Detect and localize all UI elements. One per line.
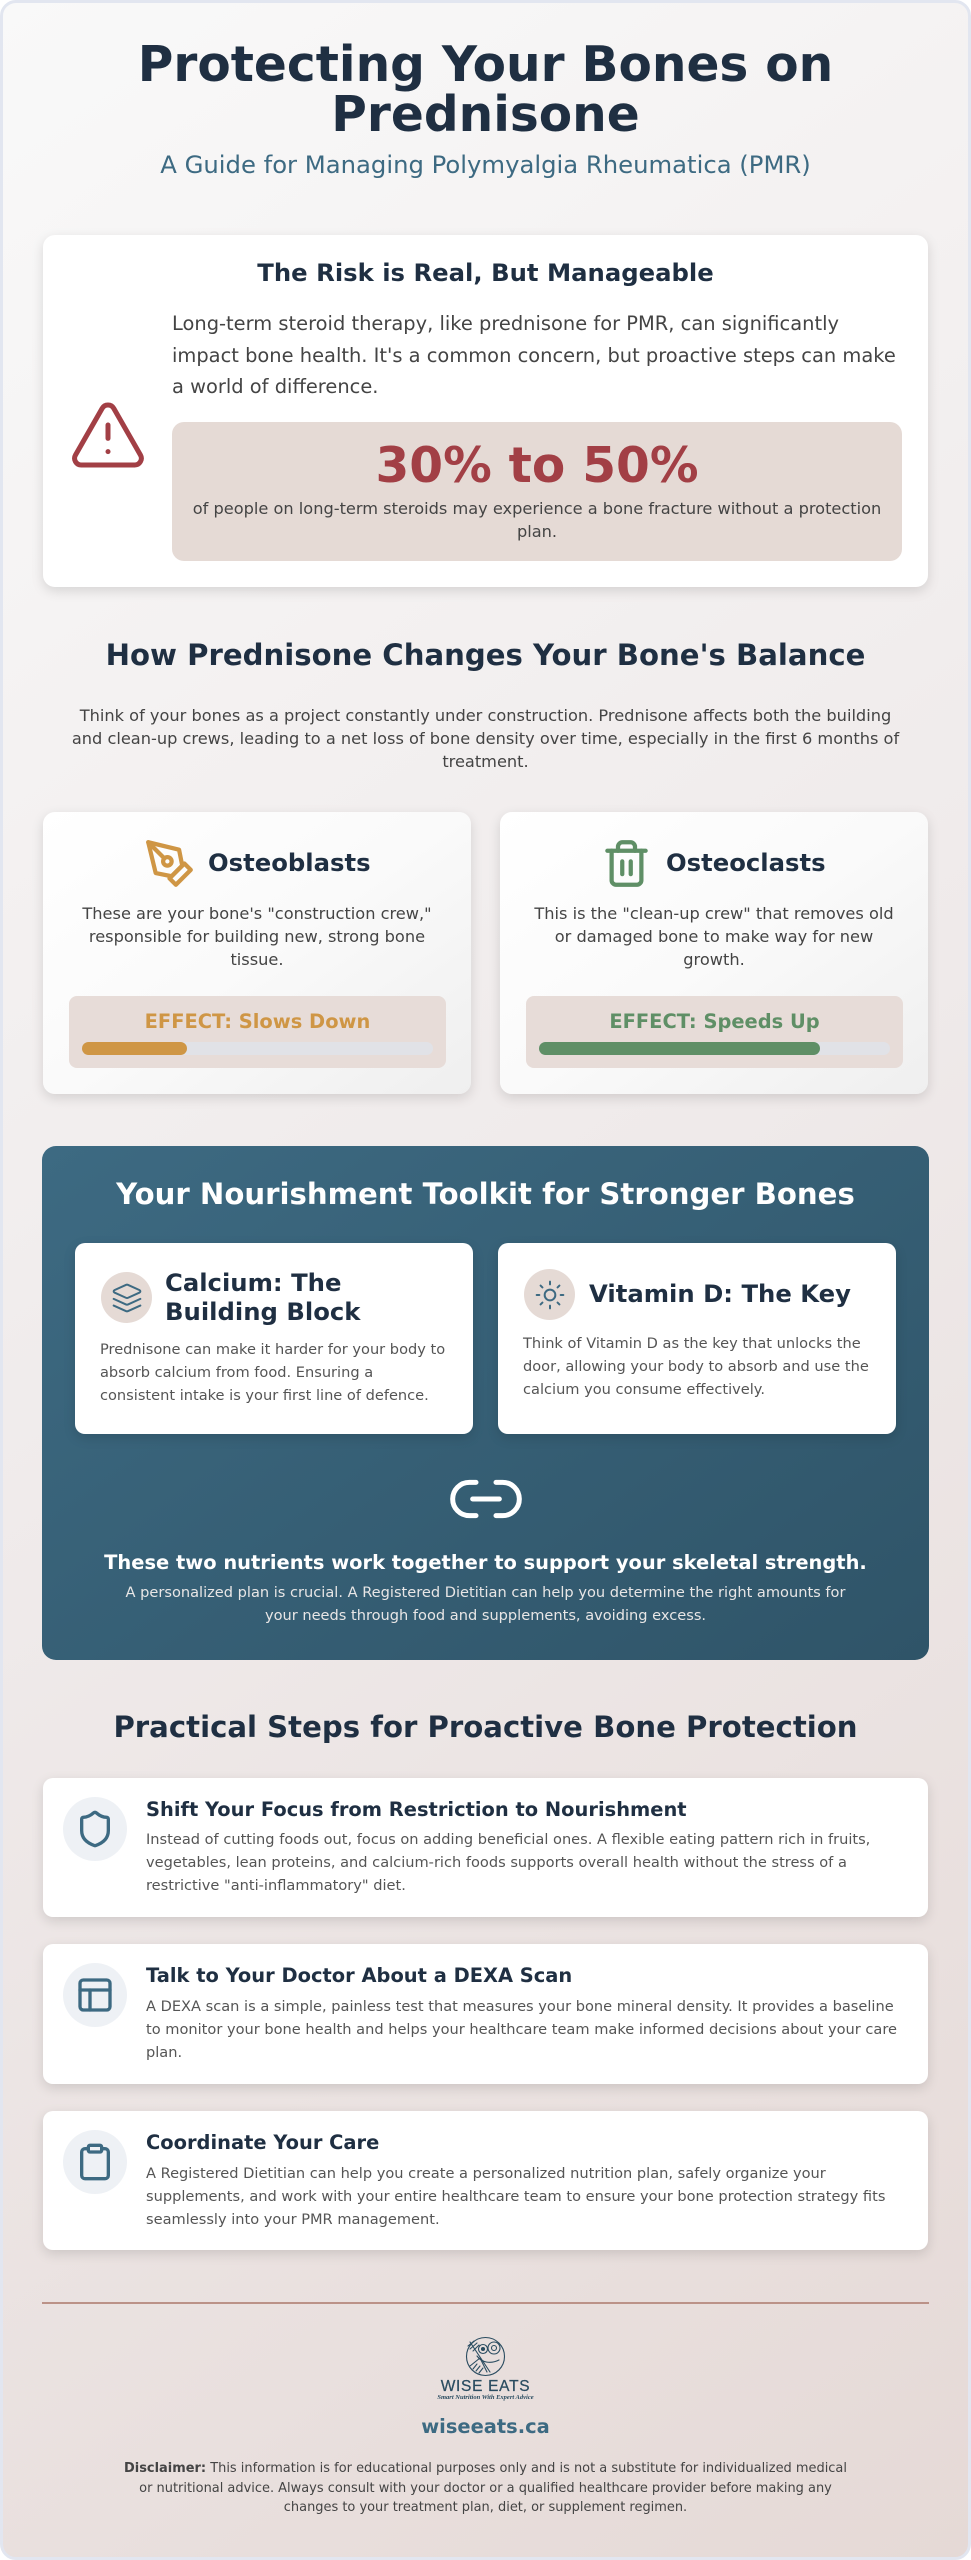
calcium text: absorb calcium from food. Ensuring a	[100, 1364, 373, 1381]
step text: to monitor your bone health and helps your healthcare team make informed decisions about your care	[146, 2021, 897, 2038]
stat caption: plan.	[517, 522, 557, 541]
calcium text: consistent intake is your first line of defence.	[100, 1387, 429, 1404]
stat caption	[193, 499, 881, 541]
calcium text: Prednisone can make it harder for your body to	[100, 1341, 445, 1358]
stat caption: of people on long-term steroids may experience a bone fracture without a protection	[193, 499, 881, 518]
panel: osteoclasts	[500, 812, 928, 1094]
step text: vegetables, lean proteins, and calcium-rich foods supports overall health without the stress of a	[146, 1854, 847, 1871]
step text: seamlessly into your PMR management.	[146, 2211, 440, 2228]
step: nourishment focus	[43, 1778, 928, 1917]
description: responsible for building new, strong bone	[89, 927, 425, 946]
toolkit note: A personalized plan is crucial. A Registered Dietitian can help you determine the right amounts for	[126, 1584, 845, 1601]
logo	[437, 2337, 534, 2401]
step title: Talk to Your Doctor About a DEXA Scan	[146, 1964, 572, 1987]
icon: link	[450, 1480, 522, 1518]
card: calcium	[75, 1243, 473, 1434]
intro paragraph: treatment.	[442, 752, 529, 771]
icon: layout	[63, 1963, 127, 2027]
icon: sun	[524, 1269, 575, 1320]
vitamin D text: door, allowing your body to absorb and use the	[523, 1358, 869, 1375]
disclaimer	[124, 2461, 847, 2515]
step text	[146, 1831, 870, 1894]
risk paragraph: a world of difference.	[172, 375, 378, 398]
stat box	[172, 422, 902, 561]
step text: restrictive "anti-inflammatory" diet.	[146, 1877, 406, 1894]
description	[534, 904, 894, 969]
step text	[146, 1998, 897, 2061]
website: wiseeats.ca	[421, 2415, 550, 2438]
risk heading: The Risk is Real, But Manageable	[257, 258, 714, 287]
step: DEXA scan	[43, 1944, 928, 2084]
risk paragraph: Long-term steroid therapy, like prednisone for PMR, can significantly	[172, 312, 839, 335]
effect box	[526, 996, 903, 1068]
calcium heading: Calcium: The	[165, 1268, 341, 1297]
effect box	[69, 996, 446, 1068]
panel: nourishment toolkit	[42, 1146, 929, 1660]
calcium heading: Building Block	[165, 1297, 360, 1326]
heading: bone balance: How Prednisone Changes Your Bone's Balance	[106, 638, 865, 672]
step text: supplements, and work with your entire healthcare team to ensure your bone protection strategy fits	[146, 2188, 885, 2205]
description: or damaged bone to make way for new	[555, 927, 873, 946]
intro paragraph: and clean-up crews, leading to a net loss of bone density over time, especially in the first 6 months of	[72, 729, 899, 748]
risk paragraph	[172, 312, 896, 398]
icon: layers	[101, 1272, 152, 1323]
logo wordmark: WISE EATS	[441, 2378, 530, 2395]
heading: practical steps: Practical Steps for Proactive Bone Protection	[113, 1710, 858, 1744]
title: Protecting Your Bones on	[138, 37, 833, 93]
step text	[146, 2165, 885, 2228]
name: Osteoblasts	[208, 848, 371, 877]
calcium heading	[165, 1268, 361, 1326]
description: growth.	[683, 950, 745, 969]
icon: trash	[605, 840, 648, 887]
disclaimer: changes to your treatment plan, diet, or supplement regimen.	[284, 2500, 687, 2515]
name: Osteoclasts	[666, 848, 826, 877]
title	[138, 37, 833, 142]
stat number: 30% to 50%	[375, 438, 699, 494]
logo tagline: Smart Nutrition With Expert Advice	[437, 2394, 534, 2401]
step title: Coordinate Your Care	[146, 2131, 379, 2154]
step text: A Registered Dietitian can help you create a personalized nutrition plan, safely organize your	[146, 2165, 826, 2182]
disclaimer: or nutritional advice. Always consult with your doctor or a qualified healthcare provider before making any	[139, 2480, 832, 2496]
effect bar	[82, 1042, 433, 1055]
description: This is the "clean-up crew" that removes old	[534, 904, 894, 923]
step title: Shift Your Focus from Restriction to Nourishment	[146, 1798, 687, 1821]
description	[82, 904, 432, 969]
card: vitamin D	[498, 1243, 896, 1434]
description: tissue.	[230, 950, 284, 969]
icon: pen tool	[146, 840, 193, 887]
effect bar	[539, 1042, 890, 1055]
effect label: EFFECT: Speeds Up	[609, 1010, 820, 1033]
toolkit summary: These two nutrients work together to support your skeletal strength.	[104, 1551, 867, 1574]
step text: plan.	[146, 2044, 182, 2061]
toolkit note: your needs through food and supplements, avoiding excess.	[265, 1607, 706, 1624]
logo mark: owl and fork	[466, 2337, 506, 2376]
vitamin D text: calcium you consume effectively.	[523, 1381, 765, 1398]
intro paragraph	[72, 706, 900, 771]
title: Prednisone	[331, 86, 640, 142]
toolkit note	[126, 1584, 846, 1624]
vitamin D text	[522, 1335, 869, 1398]
intro paragraph: Think of your bones as a project constantly under construction. Prednisone affects both the building	[80, 706, 891, 725]
icon: warning triangle	[72, 402, 144, 468]
icon: shield	[63, 1797, 127, 1861]
effect label: EFFECT: Slows Down	[145, 1010, 370, 1033]
step text: Instead of cutting foods out, focus on adding beneficial ones. A flexible eating pattern rich in fruits,	[146, 1831, 870, 1848]
calcium text	[100, 1341, 445, 1404]
toolkit heading: Your Nourishment Toolkit for Stronger Bones	[116, 1177, 855, 1211]
disclaimer: Disclaimer: This information is for educational purposes only and is not a substitute for individualized medical	[124, 2461, 847, 2476]
icon: clipboard	[63, 2130, 127, 2194]
vitamin D text: Think of Vitamin D as the key that unlocks the	[523, 1335, 861, 1352]
subtitle: A Guide for Managing Polymyalgia Rheumatica (PMR)	[160, 150, 811, 179]
panel: osteoblasts	[43, 812, 471, 1094]
step text: A DEXA scan is a simple, painless test that measures your bone mineral density. It provides a baseline	[146, 1998, 894, 2015]
risk paragraph: impact bone health. It's a common concern, but proactive steps can make	[172, 344, 896, 367]
description: These are your bone's "construction crew,"	[82, 904, 432, 923]
vitamin D heading: Vitamin D: The Key	[589, 1279, 851, 1308]
step: coordinate care	[43, 2111, 928, 2250]
panel: risk	[43, 235, 928, 587]
